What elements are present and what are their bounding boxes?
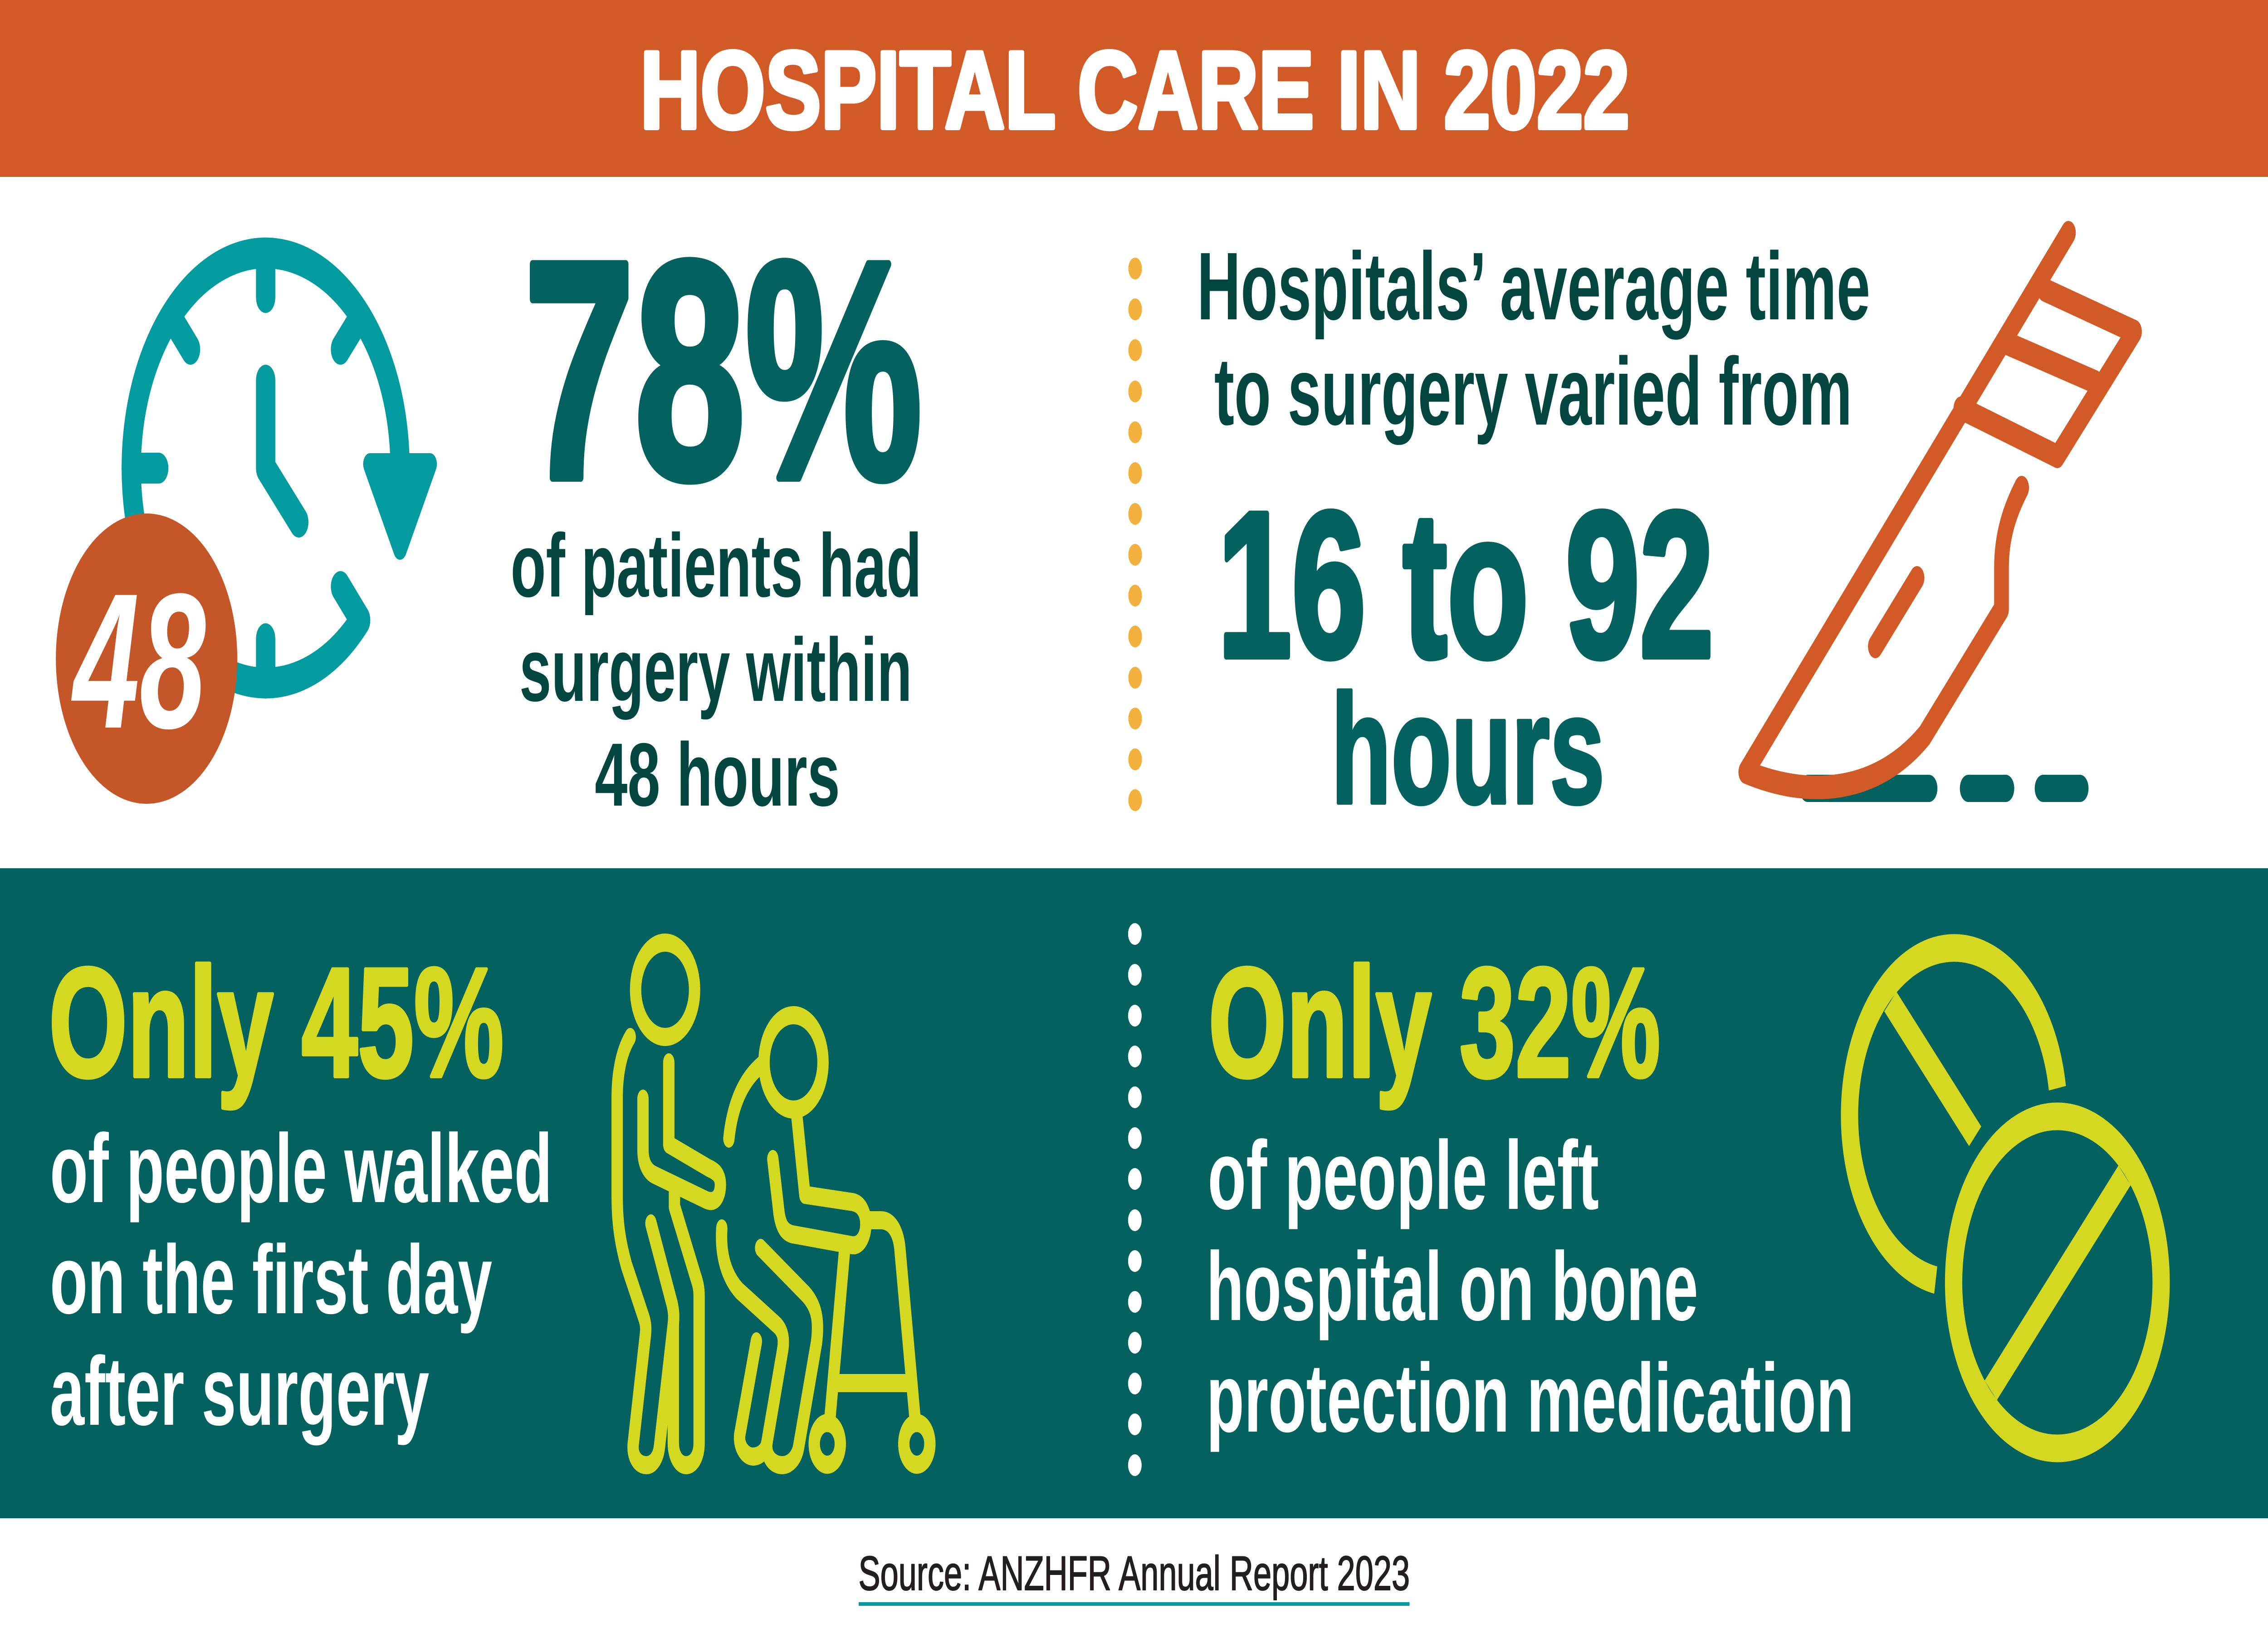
icon: 48 hours badge: 48 [69, 553, 206, 769]
panel: teal band [0, 868, 2268, 1518]
text block: of people walked on the first day after surgery: after surgery [50, 1337, 429, 1446]
source citation: Source: ANZHFR Annual Report 2023 [858, 1546, 1410, 1600]
text block: of people walked on the first day after surgery [50, 1114, 552, 1446]
text block: of people left hospital on bone protection medication: of people left [1207, 1121, 1599, 1230]
statistic: only 32%: Only 32% [1208, 935, 1661, 1110]
statistic: 16 to 92 hours: hours [1331, 662, 1605, 836]
icon: clock with arrow [131, 253, 430, 683]
icon: carer helping patient with walking frame [617, 943, 930, 1465]
statistic: 16 to 92 hours [1217, 469, 1714, 836]
icon: scalpel with incision line [1746, 233, 2135, 788]
panel: title banner [0, 0, 2268, 177]
text block: of patients had surgery within 48 hours: 48 hours [595, 724, 840, 825]
text block: of people left hospital on bone protection medication: hospital on bone [1206, 1232, 1698, 1341]
divider: white dotted line [1128, 923, 1142, 1476]
statistic: 78%: 78% [524, 197, 922, 543]
text block: of patients had surgery within 48 hours [511, 515, 922, 825]
text block: of people left hospital on bone protection medication [1206, 1121, 1854, 1452]
text block: of people walked on the first day after surgery: on the first day [50, 1225, 492, 1334]
panel: bone protection medication [1206, 935, 2161, 1452]
statistic: 16 to 92 hours: 16 to 92 [1217, 469, 1714, 700]
icon: two pills [1849, 948, 2161, 1448]
text block: hospitals average time to surgery varied from: Hospitals’ average time [1197, 233, 1870, 340]
title: HOSPITAL CARE IN 2022 [640, 29, 1630, 152]
panel: walking on first day [49, 935, 930, 1465]
text block: of people left hospital on bone protection medication: protection medication [1206, 1344, 1854, 1452]
divider: yellow dotted line [1129, 258, 1142, 811]
text block: of patients had surgery within 48 hours: surgery within [519, 620, 912, 720]
text block: of people walked on the first day after surgery: of people walked [50, 1114, 552, 1223]
panel: 78 percent had surgery within 48 hours [56, 197, 922, 825]
icon: 48 hours badge [56, 513, 237, 804]
statistic: only 45%: Only 45% [49, 935, 504, 1110]
panel: time to surgery [1197, 233, 2135, 836]
text block: hospitals average time to surgery varied from: to surgery varied from [1214, 338, 1852, 445]
text block: of patients had surgery within 48 hours: of patients had [511, 515, 922, 616]
text block: hospitals average time to surgery varied from [1197, 233, 1870, 445]
